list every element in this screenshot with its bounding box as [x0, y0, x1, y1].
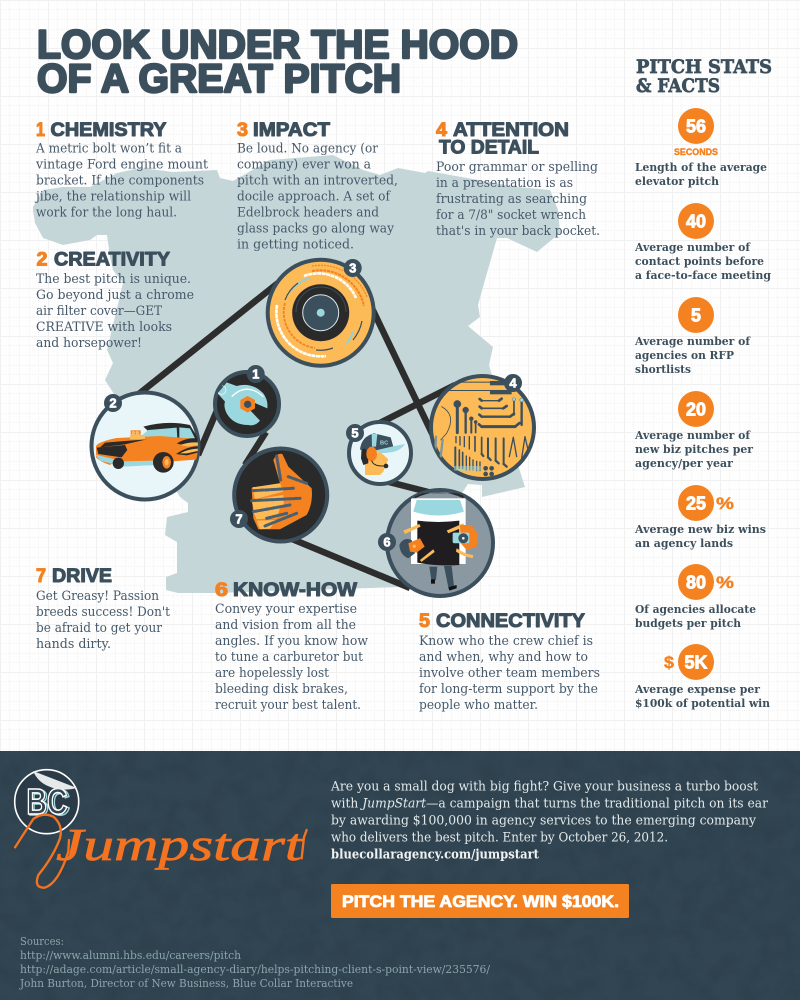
pulley 3: impact speaker: [268, 260, 374, 366]
sources: [19, 935, 490, 990]
stat: 5K expense: [634, 644, 771, 710]
number badges on the pulleys: 2: [109, 396, 117, 411]
panel: 5 connectivity: involve other team members: [419, 666, 600, 681]
panel: 6 know-how: to tune a carburetor but: [215, 650, 364, 665]
panel: 1 chemistry: bracket. If the components: [36, 174, 204, 189]
panel: 1 chemistry: CHEMISTRY: [50, 119, 166, 141]
stat: 20 pitches: Average number of: [634, 428, 751, 442]
panel: 2 creativity: CREATIVE with looks: [36, 320, 172, 335]
panel: 4 attention to detail: for a 7/8" socket wrench: [436, 208, 586, 223]
campaign copy: [330, 780, 769, 862]
stat: 56 seconds: [635, 108, 767, 188]
stat: 20 pitches: agency/per year: [635, 456, 734, 470]
stat: 40 contact points: 40: [686, 212, 706, 232]
panel: 6 know-how: bleeding disk brakes,: [215, 682, 348, 697]
stat: 80 percent: budgets per pitch: [635, 616, 742, 630]
campaign copy: by awarding $100,000 in agency services to the emerging company: [331, 814, 757, 828]
panel: 1 chemistry: A metric bolt won’t fit a: [35, 142, 182, 157]
panel: 1 chemistry: jibe, the relationship will: [34, 190, 191, 205]
panel: 6 know-how: [215, 579, 368, 713]
pulley 1: chemistry wrench and nut: [215, 372, 279, 436]
panel: 7 drive: breeds success! Don't: [36, 605, 171, 620]
panel: 7 drive: hands dirty.: [36, 637, 111, 652]
panel: 3 impact: company) ever won a: [237, 158, 371, 173]
panel: 1 chemistry: work for the long haul.: [36, 206, 177, 221]
panel: 4 attention to detail: that's in your back pocket.: [436, 224, 600, 239]
pulley 4: tool board: [431, 376, 534, 479]
panel: 2 creativity: [36, 249, 194, 351]
panel: 5 connectivity: 5: [419, 610, 430, 632]
belts connecting the engine pulleys: [135, 283, 455, 588]
pulley 5: crew chief with headset: BC: [380, 441, 388, 447]
stat: 5K expense: 5K: [684, 652, 708, 672]
panel: 3 impact: glass packs go along way: [237, 222, 395, 237]
campaign copy: Are you a small dog with big fight? Give your business a turbo boost: [330, 780, 759, 794]
stat: 5K expense: $: [664, 653, 675, 672]
stat: 40 contact points: contact points before: [635, 254, 764, 268]
stat: 40 contact points: [634, 203, 771, 282]
panel: 5 connectivity: Know who the crew chief is: [419, 634, 593, 649]
heading: pitch stats and facts: PITCH STATS: [636, 56, 772, 78]
panel: 3 impact: docile approach. A set of: [237, 190, 391, 205]
number badges on the pulleys: 5: [351, 426, 359, 441]
stat: 56 seconds: Length of the average: [635, 160, 767, 174]
panel: 3 impact: 3: [237, 119, 248, 141]
panel: 6 know-how: are hopelessly lost: [215, 666, 330, 681]
panel: 4 attention to detail: [436, 119, 600, 239]
pulley 6: overhead view of car and crew: [387, 490, 493, 596]
stat: 5K expense: $100k of potential win: [635, 696, 771, 710]
panel: 2 creativity: CREATIVITY: [54, 249, 170, 271]
stat: 20 pitches: 20: [686, 400, 706, 420]
panel: 5 connectivity: people who matter.: [419, 698, 538, 713]
panel: 3 impact: [237, 119, 398, 253]
panel: 4 attention to detail: ATTENTION: [453, 119, 569, 141]
campaign copy: who delivers the best pitch. Enter by October 26, 2012.: [331, 830, 668, 846]
stat: 56 seconds: SECONDS: [674, 147, 718, 158]
title: OF A GREAT PITCH: [37, 57, 401, 101]
stat: 25 percent: an agency lands: [635, 536, 733, 550]
engine silhouette backdrop: [33, 155, 560, 593]
call to action button: PITCH THE AGENCY. WIN $100K.: [342, 893, 619, 911]
pulley 7: thumbs up hand: [234, 448, 327, 542]
stat: 20 pitches: [634, 391, 754, 470]
panel: 7 drive: Get Greasy! Passion: [36, 589, 159, 604]
stat: 20 pitches: new biz pitches per: [635, 442, 754, 456]
title: LOOK UNDER THE HOOD: [37, 23, 518, 67]
stat: 56 seconds: 56: [686, 116, 706, 136]
campaign copy: with JumpStart—a campaign that turns the traditional pitch on its ear: [331, 796, 769, 812]
number badges on the pulleys: 3: [349, 261, 356, 276]
heading: pitch stats and facts: [636, 56, 772, 97]
call to action button: [331, 884, 629, 918]
stat: 5K expense: Average expense per: [634, 682, 761, 696]
panel: 5 connectivity: CONNECTIVITY: [436, 610, 585, 632]
stat: 5 agencies: shortlists: [635, 362, 691, 376]
panel: 1 chemistry: vintage Ford engine mount: [35, 158, 209, 173]
panel: 3 impact: Be loud. No agency (or: [237, 142, 379, 157]
stat: 25 percent: %: [716, 494, 734, 513]
panel: 5 connectivity: and when, why and how to: [419, 650, 588, 665]
panel: 1 chemistry: [34, 119, 209, 221]
stat: 80 percent: %: [716, 573, 734, 592]
logo: BC sticker: BC: [26, 781, 68, 822]
panel: 1 chemistry: 1: [36, 119, 45, 141]
stat: 25 percent: 25: [686, 494, 706, 514]
pulley 2: orange muscle car: [92, 392, 200, 500]
sources: John Burton, Director of New Business, Blue Collar Interactive: [19, 977, 353, 990]
panel: 7 drive: DRIVE: [52, 565, 112, 587]
panel: 3 impact: IMPACT: [253, 119, 330, 141]
panel: 2 creativity: Go beyond just a chrome: [36, 288, 194, 303]
stat: 5 agencies: Average number of: [634, 334, 751, 348]
panel: 6 know-how: Convey your expertise: [215, 602, 357, 617]
panel: 3 impact: Edelbrock headers and: [237, 206, 379, 221]
panel: 2 creativity: and horsepower!: [36, 336, 142, 351]
stat: 40 contact points: Average number of: [634, 240, 751, 254]
panel: 3 impact: pitch with an introverted,: [237, 174, 398, 189]
number badges on the pulleys: 6: [383, 535, 391, 550]
panel: 6 know-how: angles. If you know how: [215, 634, 368, 649]
panel: 4 attention to detail: in a presentation is as: [436, 176, 573, 191]
stat: 40 contact points: a face-to-face meeting: [635, 268, 771, 282]
stat: 80 percent: Of agencies allocate: [635, 602, 756, 616]
panel: 4 attention to detail: Poor grammar or spelling: [436, 160, 598, 175]
logo: BC sticker: [15, 770, 79, 834]
panel: 2 creativity: air filter cover—GET: [36, 304, 162, 319]
panel: 6 know-how: KNOW-HOW: [233, 579, 358, 601]
stat: 80 percent: 80: [686, 572, 706, 592]
number badges on the pulleys: 4: [509, 376, 517, 391]
logo: Jumpstart script: Jumpstart: [56, 819, 304, 870]
footer band: [0, 751, 800, 1000]
title: [37, 23, 518, 101]
heading: pitch stats and facts: & FACTS: [636, 75, 720, 97]
panel: 6 know-how: recruit your best talent.: [215, 698, 361, 713]
panel: 4 attention to detail: TO DETAIL: [439, 136, 539, 158]
panel: 3 impact: in getting noticed.: [237, 238, 354, 253]
panel: 5 connectivity: for long-term support by the: [419, 682, 598, 697]
stat: 5 agencies: 5: [691, 306, 701, 326]
number badges on the pulleys: 1: [252, 367, 259, 382]
stat: 5 agencies: agencies on RFP: [635, 348, 734, 362]
sources: http://adage.com/article/small-agency-diary/helps-pitching-client-s-point-view/235576/: [20, 963, 490, 976]
panel: 2 creativity: The best pitch is unique.: [36, 272, 191, 287]
sources: Sources:: [20, 935, 64, 948]
panel: 4 attention to detail: frustrating as searching: [436, 192, 587, 207]
number badges on the pulleys: 7: [235, 512, 243, 527]
panel: 5 connectivity: [419, 610, 600, 713]
sources: http://www.alumni.hbs.edu/careers/pitch: [20, 949, 241, 962]
stat: 56 seconds: elevator pitch: [635, 174, 720, 188]
campaign copy: bluecollaragency.com/jumpstart: [331, 848, 539, 862]
pulley 5: crew chief with headset: [349, 422, 411, 484]
stat: 25 percent: [634, 485, 766, 550]
logo: BC sticker: BC: [28, 782, 70, 823]
panel: 7 drive: be afraid to get your: [36, 621, 163, 636]
stat: 5 agencies: [634, 297, 751, 376]
panel: 7 drive: 7: [36, 565, 46, 587]
panel: 7 drive: [36, 565, 171, 652]
panel: 2 creativity: 2: [36, 249, 48, 271]
stat: 80 percent: [635, 564, 756, 630]
panel: 6 know-how: and vision from all the: [215, 618, 356, 633]
number badges on the pulleys: [104, 259, 522, 551]
panel: 4 attention to detail: 4: [436, 119, 447, 141]
logo: Jumpstart script: [15, 815, 307, 888]
panel: 6 know-how: 6: [215, 579, 228, 601]
stat: 25 percent: Average new biz wins: [634, 522, 766, 536]
